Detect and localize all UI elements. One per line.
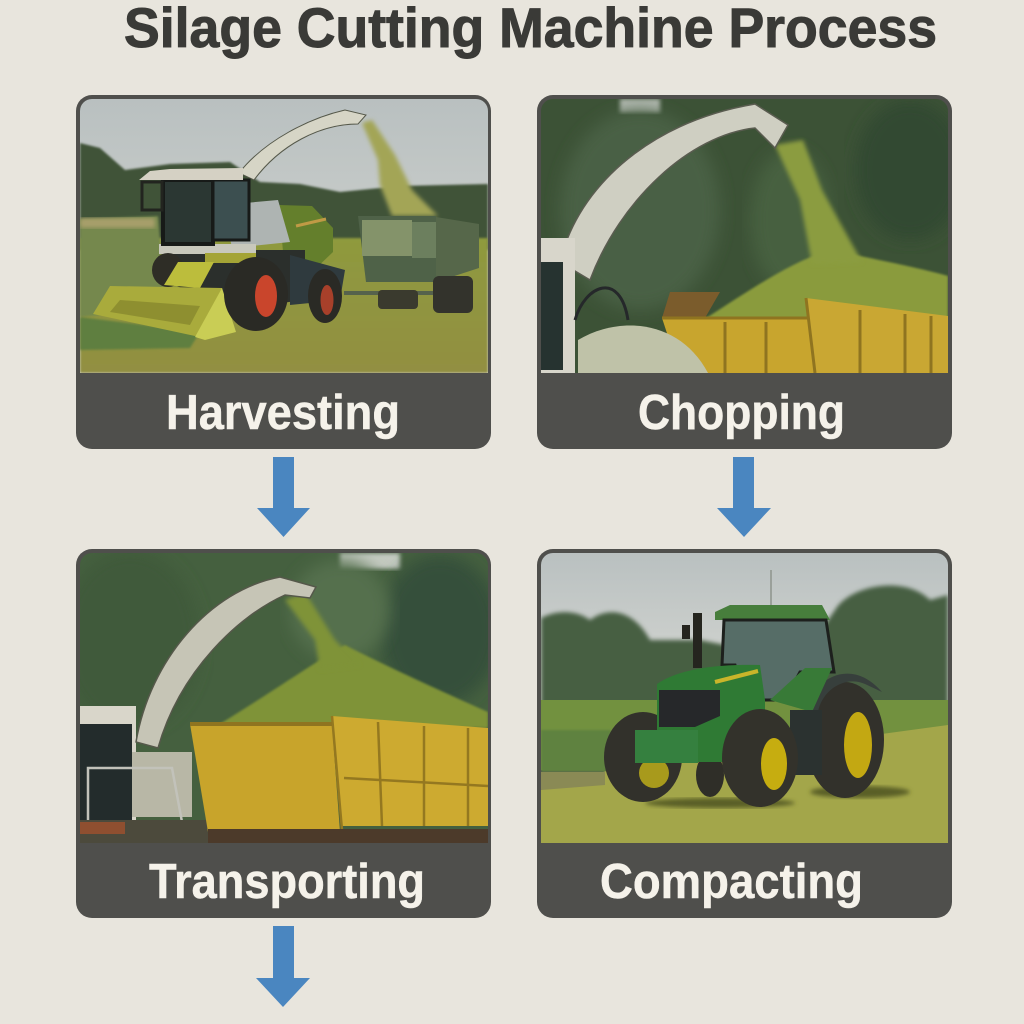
machine — [541, 238, 708, 373]
wheels — [290, 255, 345, 305]
photo: forage harvester in a field — [80, 99, 488, 373]
panel: harvesting — [76, 95, 491, 449]
crop heap — [706, 254, 948, 316]
rear wheel — [814, 682, 884, 798]
photo: yellow trailer with heap of silage — [60, 550, 500, 843]
photo: green tractor on silage — [541, 553, 949, 843]
hood — [657, 665, 765, 762]
panel: transporting — [60, 549, 500, 918]
tractor — [604, 570, 910, 808]
chopped crop stream — [362, 120, 438, 216]
spout — [136, 577, 316, 748]
spout — [239, 110, 366, 180]
panel: chopping — [537, 95, 965, 449]
chopped crop stream — [775, 140, 862, 264]
arrow: harvesting to transporting — [257, 457, 310, 537]
label: Transporting: Transporting — [149, 855, 425, 909]
chopped crop stream — [284, 596, 342, 662]
machine — [80, 706, 208, 843]
label: Compacting: Compacting — [600, 855, 863, 909]
yellow trailer — [662, 292, 948, 373]
header — [164, 262, 214, 288]
spout — [565, 104, 788, 280]
trailer — [344, 216, 479, 313]
crop heap — [218, 645, 488, 728]
harvester body — [93, 168, 345, 340]
arrow: chopping to compacting — [717, 457, 771, 537]
front right wheel — [722, 709, 798, 807]
photo: spout filling a yellow trailer — [541, 99, 965, 373]
arrow: transporting onward — [256, 926, 310, 1007]
label: Chopping: Chopping — [638, 386, 845, 440]
label: Harvesting: Harvesting — [166, 386, 400, 440]
cab — [715, 605, 830, 620]
yellow trailer — [190, 716, 488, 843]
panel: compacting — [537, 549, 952, 918]
front left wheel — [604, 712, 682, 802]
rear fender — [804, 674, 882, 712]
